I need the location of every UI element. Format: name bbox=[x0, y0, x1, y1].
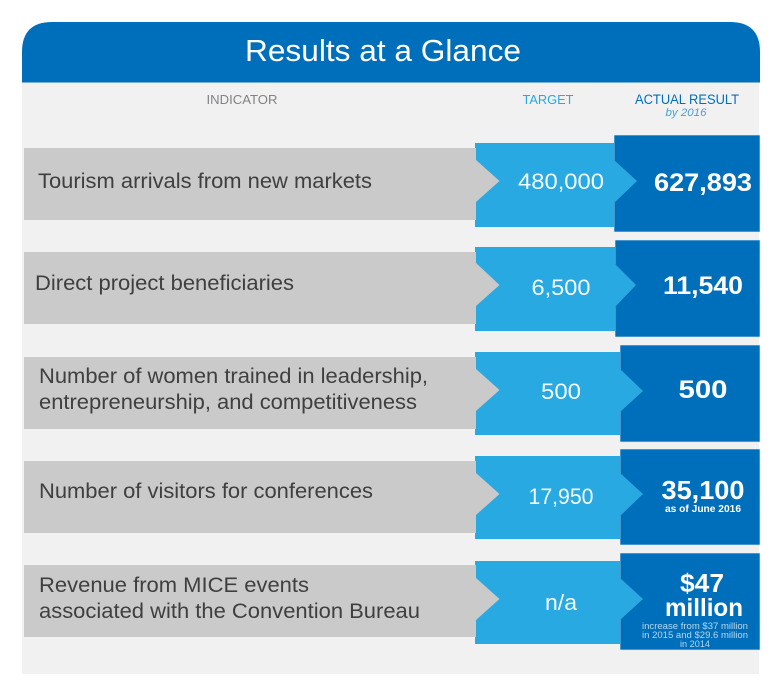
indicator bar: conference visitors: Number of visitors for conferences bbox=[39, 480, 373, 503]
actual result: 11,540 bbox=[615, 240, 760, 337]
actual result: 500: 500 bbox=[678, 376, 728, 404]
indicator bar: tourism arrivals: Tourism arrivals from new markets bbox=[38, 170, 372, 193]
actual result: 35,100 bbox=[620, 449, 760, 545]
actual result: 35,100: 35,100 bbox=[662, 475, 744, 505]
indicator bar: women trained: Number of women trained in leadership, bbox=[39, 365, 428, 388]
indicator bar: tourism arrivals bbox=[24, 148, 500, 220]
actual result: $47 million: in 2015 and $29.6 million bbox=[642, 630, 748, 641]
actual result: $47 million: in 2014 bbox=[680, 639, 710, 650]
column heading: actual result by 2016: by 2016 bbox=[666, 107, 707, 119]
target chevron: 17,950: 17,950 bbox=[528, 484, 594, 509]
actual result: 35,100: as of June 2016 bbox=[665, 504, 741, 515]
column heading: actual result by 2016 bbox=[635, 92, 739, 119]
title: Results at a Glance bbox=[245, 33, 521, 68]
target chevron: 6,500 bbox=[475, 247, 636, 331]
column heading: target: TARGET bbox=[522, 92, 574, 107]
panel: header banner bbox=[22, 22, 760, 82]
target chevron: 17,950 bbox=[475, 456, 643, 539]
indicator bar: MICE revenue bbox=[24, 565, 500, 637]
row: direct project beneficiaries bbox=[24, 240, 760, 337]
indicator bar: beneficiaries bbox=[24, 252, 500, 324]
target chevron: 500: 500 bbox=[541, 379, 581, 404]
column heading: actual result by 2016: ACTUAL RESULT bbox=[635, 92, 739, 107]
column heading: indicator: INDICATOR bbox=[206, 92, 278, 107]
target chevron: n/a bbox=[475, 561, 643, 644]
row: MICE revenue bbox=[24, 553, 760, 650]
actual result: $47 million: increase from $37 million bbox=[642, 621, 748, 632]
indicator bar: MICE revenue: Revenue from MICE events bbox=[39, 574, 309, 597]
indicator bar: conference visitors bbox=[24, 461, 500, 533]
target chevron: 500 bbox=[475, 352, 643, 435]
actual result: 627,893 bbox=[614, 135, 760, 232]
actual result: 11,540: 11,540 bbox=[663, 272, 743, 300]
actual result: 627,893: 627,893 bbox=[654, 169, 752, 197]
actual result: $47 million bbox=[620, 553, 760, 650]
target chevron: 480,000 bbox=[475, 143, 637, 227]
row: women trained bbox=[24, 345, 760, 442]
target chevron: 6,500: 6,500 bbox=[532, 275, 590, 300]
target chevron: 480,000: 480,000 bbox=[518, 169, 604, 194]
row: tourism arrivals bbox=[24, 135, 760, 232]
row: conference visitors bbox=[24, 449, 760, 545]
indicator bar: MICE revenue: associated with the Convention Bureau bbox=[39, 600, 420, 623]
actual result: 500 bbox=[620, 345, 760, 442]
indicator bar: beneficiaries: Direct project beneficiaries bbox=[35, 272, 294, 295]
indicator bar: women trained bbox=[24, 357, 500, 429]
actual result: $47 million: $47 bbox=[680, 568, 724, 598]
actual result: $47 million: million bbox=[665, 594, 743, 622]
indicator bar: women trained: entrepreneurship, and competitiveness bbox=[39, 391, 417, 414]
target chevron: n/a: n/a bbox=[545, 590, 578, 615]
